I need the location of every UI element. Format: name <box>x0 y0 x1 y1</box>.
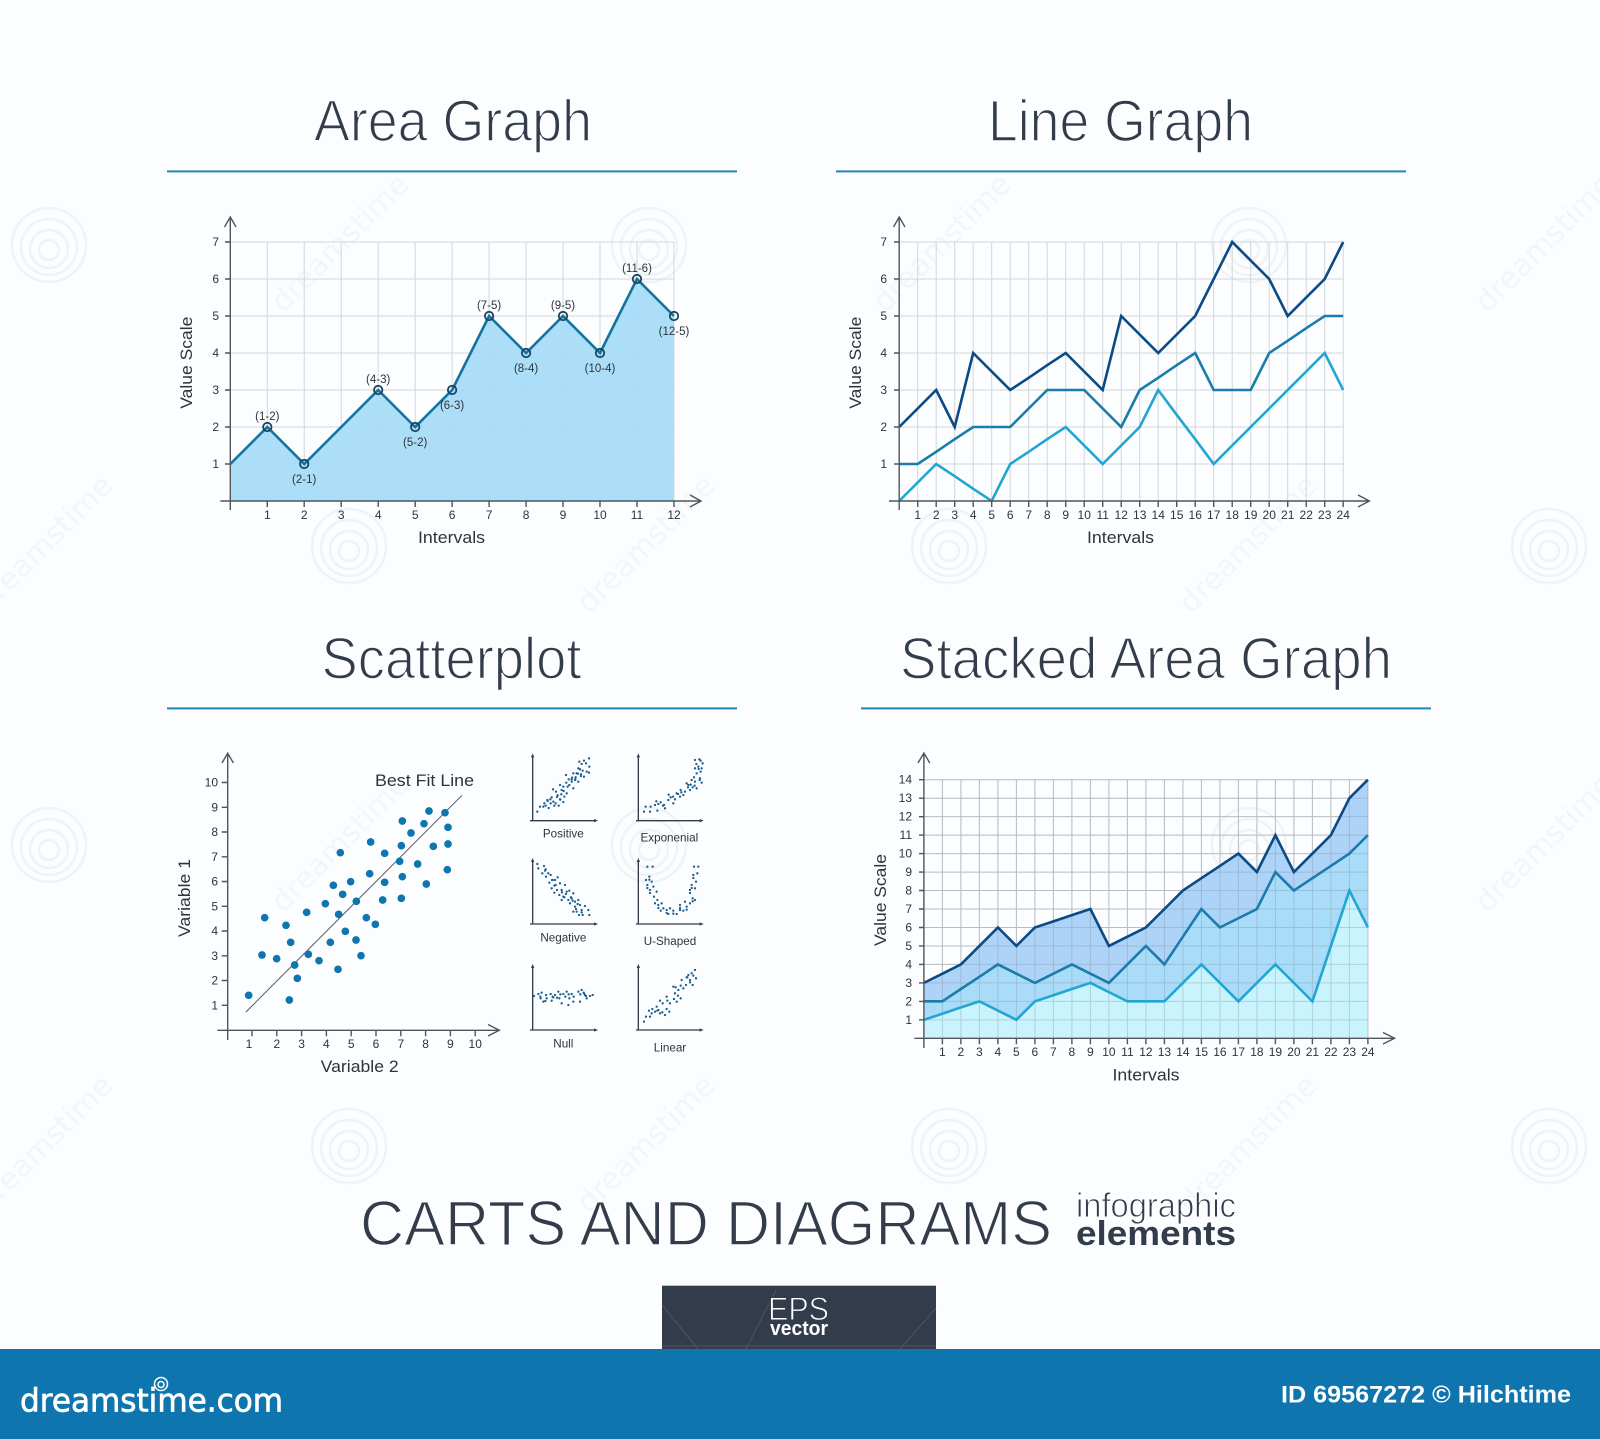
y tick labels: 4 <box>905 957 912 971</box>
text: dreamstime <box>570 468 722 620</box>
chart: main scatterplot <box>175 753 499 1076</box>
y tick labels: 6 <box>212 272 219 286</box>
y tick labels <box>880 235 887 471</box>
y tick labels: 9 <box>905 865 912 879</box>
x tick labels: 8 <box>422 1037 429 1051</box>
point labels: (4-3) <box>366 374 391 386</box>
small plot: u-shaped <box>636 858 704 948</box>
badge: eps vector: EPS <box>768 1291 829 1327</box>
x tick labels: 12 <box>1115 508 1128 522</box>
x tick labels: 7 <box>1025 508 1032 522</box>
badge: eps vector: vector <box>770 1318 828 1340</box>
chart: line graph <box>846 217 1369 547</box>
icon: spiral <box>154 1378 168 1390</box>
y tick labels: 12 <box>899 810 912 824</box>
x tick labels: 8 <box>1069 1045 1076 1059</box>
text: dreamstime <box>570 1068 722 1220</box>
point labels: (9-5) <box>551 300 575 312</box>
point labels: (12-5) <box>659 326 690 338</box>
x tick labels: 12 <box>1139 1045 1153 1059</box>
x tick labels: 13 <box>1158 1045 1171 1059</box>
y tick labels: 1 <box>905 1013 912 1027</box>
x tick labels: 20 <box>1263 508 1276 522</box>
subtitle: infographic elements <box>1076 1187 1236 1253</box>
heading: line graph: Line Graph <box>988 89 1253 154</box>
x tick labels <box>246 1037 482 1051</box>
panel: line graph <box>836 89 1406 547</box>
x tick labels: 1 <box>264 508 271 522</box>
image id and credit: ID 69567272 © Hilchtime <box>1281 1382 1571 1409</box>
x tick labels: 10 <box>593 508 607 522</box>
x tick labels: 21 <box>1306 1045 1319 1059</box>
point labels <box>255 263 690 486</box>
y tick labels: 7 <box>212 235 219 249</box>
y tick labels: 5 <box>880 309 887 323</box>
x tick labels: 9 <box>1062 508 1069 522</box>
subtitle: infographic elements: infographic <box>1076 1187 1236 1225</box>
x tick labels: 3 <box>338 508 345 522</box>
point labels: (6-3) <box>440 400 464 412</box>
small plot: null <box>530 964 598 1050</box>
x tick labels <box>914 508 1350 522</box>
x tick labels: 3 <box>976 1045 983 1059</box>
x tick labels: 22 <box>1300 508 1313 522</box>
x tick labels: 1 <box>914 508 921 522</box>
x tick labels: 18 <box>1250 1045 1264 1059</box>
x tick labels: 5 <box>1013 1045 1020 1059</box>
y tick labels: 5 <box>211 899 218 913</box>
y tick labels: 2 <box>211 974 218 988</box>
x tick labels: 15 <box>1170 508 1184 522</box>
y tick labels: 8 <box>905 884 912 898</box>
y tick labels: 11 <box>900 828 912 842</box>
x tick labels: 24 <box>1361 1045 1375 1059</box>
axis title: variable 1: Variable 1 <box>175 859 194 937</box>
point labels: (2-1) <box>292 474 317 486</box>
x tick labels: 13 <box>1133 508 1147 522</box>
y tick labels: 9 <box>211 800 218 814</box>
point labels: (8-4) <box>514 363 538 375</box>
axes <box>217 753 499 1040</box>
axis title: value scale: Value Scale <box>846 317 865 409</box>
panel: stacked area graph <box>861 627 1431 1085</box>
x tick labels: 10 <box>1078 508 1091 522</box>
point labels: (10-4) <box>585 363 616 375</box>
x tick labels: 19 <box>1269 1045 1282 1059</box>
x tick labels: 2 <box>933 508 940 522</box>
x tick labels: 9 <box>560 508 567 522</box>
x tick labels: 10 <box>469 1037 482 1051</box>
point labels: (7-5) <box>477 300 501 312</box>
y tick labels: 13 <box>899 791 912 805</box>
y tick labels: 6 <box>905 920 912 934</box>
x tick labels: 6 <box>1032 1045 1039 1059</box>
x tick labels: 16 <box>1189 508 1202 522</box>
x tick labels: 10 <box>1102 1045 1116 1059</box>
text: dreamstime <box>1172 1068 1324 1220</box>
x tick labels: 9 <box>1087 1045 1094 1059</box>
x tick labels: 18 <box>1226 508 1239 522</box>
chart: stacked area graph <box>871 753 1395 1085</box>
x tick labels: 6 <box>449 508 456 522</box>
axes <box>220 217 701 510</box>
chart: area graph <box>177 217 701 547</box>
x tick labels: 17 <box>1232 1045 1245 1059</box>
logo: dreamstime.com: dreamstime.com <box>20 1382 283 1420</box>
point labels: (5-2) <box>403 437 428 449</box>
text: dreamstime <box>866 167 1018 319</box>
x tick labels: 4 <box>375 508 382 522</box>
axis title: intervals: Intervals <box>1087 528 1154 547</box>
small multiples: correlation types <box>530 753 704 1054</box>
x tick labels: 4 <box>970 508 977 522</box>
y tick labels: 2 <box>880 420 887 434</box>
x tick labels: 4 <box>323 1037 330 1051</box>
heading: stacked area graph: Stacked Area Graph <box>900 627 1392 692</box>
y tick labels: 8 <box>211 825 218 839</box>
x tick labels: 17 <box>1207 508 1221 522</box>
y tick labels <box>212 235 219 471</box>
small plot: u-shaped: U-Shaped <box>644 935 696 948</box>
x tick labels: 8 <box>523 508 530 522</box>
x tick labels: 3 <box>298 1037 305 1051</box>
y tick labels: 4 <box>880 346 887 360</box>
x tick labels <box>939 1045 1375 1059</box>
x tick labels: 8 <box>1044 508 1051 522</box>
text: dreamstime <box>264 767 416 919</box>
label: best fit line: Best Fit Line <box>375 772 474 790</box>
small plot: exponential: Exponenial <box>640 831 698 844</box>
x tick labels: 23 <box>1343 1045 1356 1059</box>
axis title: value scale: Value Scale <box>177 317 196 409</box>
data point markers <box>263 275 678 468</box>
x tick labels: 5 <box>988 508 995 522</box>
x tick labels: 6 <box>1007 508 1014 522</box>
y tick labels: 3 <box>905 976 912 990</box>
panel: scatterplot <box>167 627 737 1076</box>
axis title: intervals: Intervals <box>418 528 485 547</box>
small plot: linear: Linear <box>654 1041 686 1054</box>
small plot: negative <box>530 858 598 945</box>
main title: CARTS AND DIAGRAMS <box>360 1189 1052 1259</box>
y tick labels: 5 <box>212 309 219 323</box>
x tick labels: 21 <box>1281 508 1295 522</box>
point labels: (11-6) <box>622 263 652 275</box>
y tick labels: 6 <box>211 874 218 888</box>
y tick labels: 10 <box>899 847 912 861</box>
y tick labels: 1 <box>880 457 887 471</box>
x tick labels: 1 <box>939 1045 946 1059</box>
x tick labels: 15 <box>1195 1045 1208 1059</box>
axes <box>914 753 1395 1048</box>
x tick labels: 7 <box>1050 1045 1057 1059</box>
x tick labels: 7 <box>397 1037 404 1051</box>
x tick labels: 7 <box>486 508 493 522</box>
y tick labels: 4 <box>212 346 219 360</box>
y tick labels <box>899 773 912 1027</box>
text: dreamstime <box>264 167 416 319</box>
x tick labels: 23 <box>1318 508 1332 522</box>
y tick labels: 7 <box>211 850 218 864</box>
x tick labels: 4 <box>995 1045 1002 1059</box>
y tick labels: 2 <box>212 420 219 434</box>
y tick labels: 10 <box>205 776 218 790</box>
heading: scatterplot: Scatterplot <box>322 627 582 692</box>
x tick labels: 5 <box>348 1037 355 1051</box>
x tick labels: 2 <box>958 1045 965 1059</box>
y tick labels: 3 <box>211 949 218 963</box>
x tick labels: 11 <box>1121 1045 1134 1059</box>
x tick labels: 3 <box>951 508 958 522</box>
small plot: exponential <box>636 753 704 844</box>
x tick labels: 16 <box>1213 1045 1227 1059</box>
axes <box>889 217 1369 510</box>
y tick labels <box>205 776 218 1012</box>
small plot: negative: Negative <box>540 932 586 945</box>
x tick labels: 2 <box>273 1037 280 1051</box>
best fit line <box>246 795 462 1012</box>
x tick labels: 2 <box>301 508 308 522</box>
small plot: null: Null <box>553 1037 573 1050</box>
footer bar <box>0 1349 1600 1439</box>
y tick labels: 7 <box>880 235 887 249</box>
small plot: positive <box>530 753 598 841</box>
y tick labels: 6 <box>880 272 887 286</box>
subtitle: infographic elements: elements <box>1076 1215 1236 1253</box>
y tick labels: 1 <box>211 998 218 1012</box>
x tick labels: 11 <box>631 508 644 522</box>
scatter dots <box>245 807 452 1004</box>
y tick labels: 7 <box>905 902 912 916</box>
x tick labels <box>264 508 681 522</box>
x tick labels: 20 <box>1287 1045 1301 1059</box>
panel: area graph <box>167 89 737 547</box>
y tick labels: 5 <box>905 939 912 953</box>
y tick labels: 4 <box>211 924 218 938</box>
y tick labels: 3 <box>212 383 219 397</box>
small plot: positive: Positive <box>543 828 584 841</box>
y tick labels: 2 <box>905 994 912 1008</box>
x tick labels: 14 <box>1176 1045 1190 1059</box>
y tick labels: 1 <box>212 457 219 471</box>
heading: area graph: Area Graph <box>314 89 592 154</box>
badge: eps vector <box>662 1286 936 1350</box>
x tick labels: 5 <box>412 508 419 522</box>
y tick labels: 3 <box>880 383 887 397</box>
axis title: value scale: Value Scale <box>871 854 890 946</box>
x tick labels: 6 <box>373 1037 380 1051</box>
x tick labels: 1 <box>246 1037 253 1051</box>
x tick labels: 24 <box>1337 508 1350 522</box>
x tick labels: 11 <box>1096 508 1109 522</box>
x tick labels: 14 <box>1152 508 1165 522</box>
x tick labels: 22 <box>1324 1045 1338 1059</box>
x tick labels: 19 <box>1244 508 1258 522</box>
y tick labels: 14 <box>899 773 912 787</box>
x tick labels: 9 <box>447 1037 454 1051</box>
axis title: variable 2: Variable 2 <box>321 1057 399 1076</box>
small plot: linear <box>636 964 704 1054</box>
text: dreamstime <box>1172 468 1324 620</box>
point labels: (1-2) <box>255 411 280 423</box>
axis title: intervals: Intervals <box>1112 1066 1180 1085</box>
x tick labels: 12 <box>667 508 681 522</box>
